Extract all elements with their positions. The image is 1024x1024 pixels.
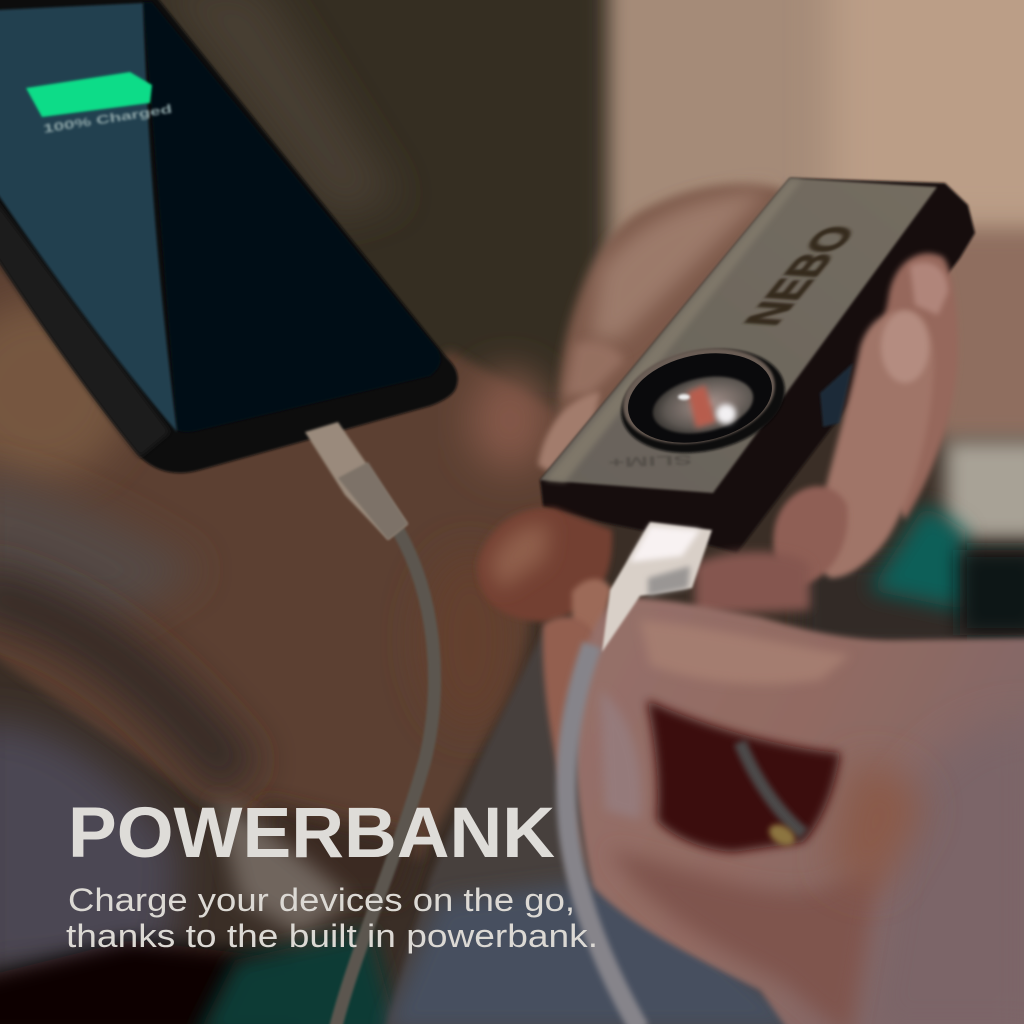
fingernail 1	[910, 262, 948, 315]
phone cable	[305, 422, 434, 1024]
phone body	[0, 0, 458, 473]
description text: Charge your devices on the go,	[68, 882, 575, 918]
left finger behind cable	[543, 617, 597, 880]
blurred forearm behind phone	[0, 230, 570, 1024]
lens	[611, 335, 795, 467]
thumb tip	[478, 508, 612, 622]
finger tip behind cable	[572, 579, 612, 640]
lower finger	[773, 486, 848, 585]
dark gap between fingers	[647, 700, 840, 852]
denim strap	[385, 622, 810, 1024]
fingers in front of device	[478, 253, 958, 622]
fingernail 2	[881, 311, 929, 383]
lower fingertips	[695, 552, 810, 615]
device highlight edge	[545, 180, 802, 482]
back of hand	[574, 597, 1024, 1024]
ring band	[740, 742, 804, 834]
NEBO logo: NEBO	[735, 224, 867, 328]
blue side button	[820, 363, 853, 427]
upper finger	[860, 253, 958, 520]
charging label: 100% Charged	[42, 102, 173, 136]
description text: thanks to the built in powerbank.	[66, 918, 598, 954]
holding hand palm	[538, 184, 800, 480]
pale knuckle	[600, 690, 642, 820]
finger highlight	[640, 620, 850, 684]
powerbank device	[540, 178, 975, 553]
SLIM+ mark: SLIM+	[608, 452, 692, 471]
white USB plug and cable	[566, 522, 712, 1024]
device body	[540, 178, 975, 553]
phone	[0, 0, 458, 473]
phone screen dark	[143, 2, 441, 432]
ring	[765, 820, 799, 850]
phone screen reflection	[0, 3, 177, 432]
description text	[66, 882, 598, 954]
phone left bezel	[0, 200, 170, 457]
device top face	[540, 178, 937, 493]
middle finger	[810, 310, 934, 578]
title: POWERBANK	[68, 794, 555, 873]
front hand	[543, 579, 1024, 1024]
battery icon	[26, 72, 152, 117]
